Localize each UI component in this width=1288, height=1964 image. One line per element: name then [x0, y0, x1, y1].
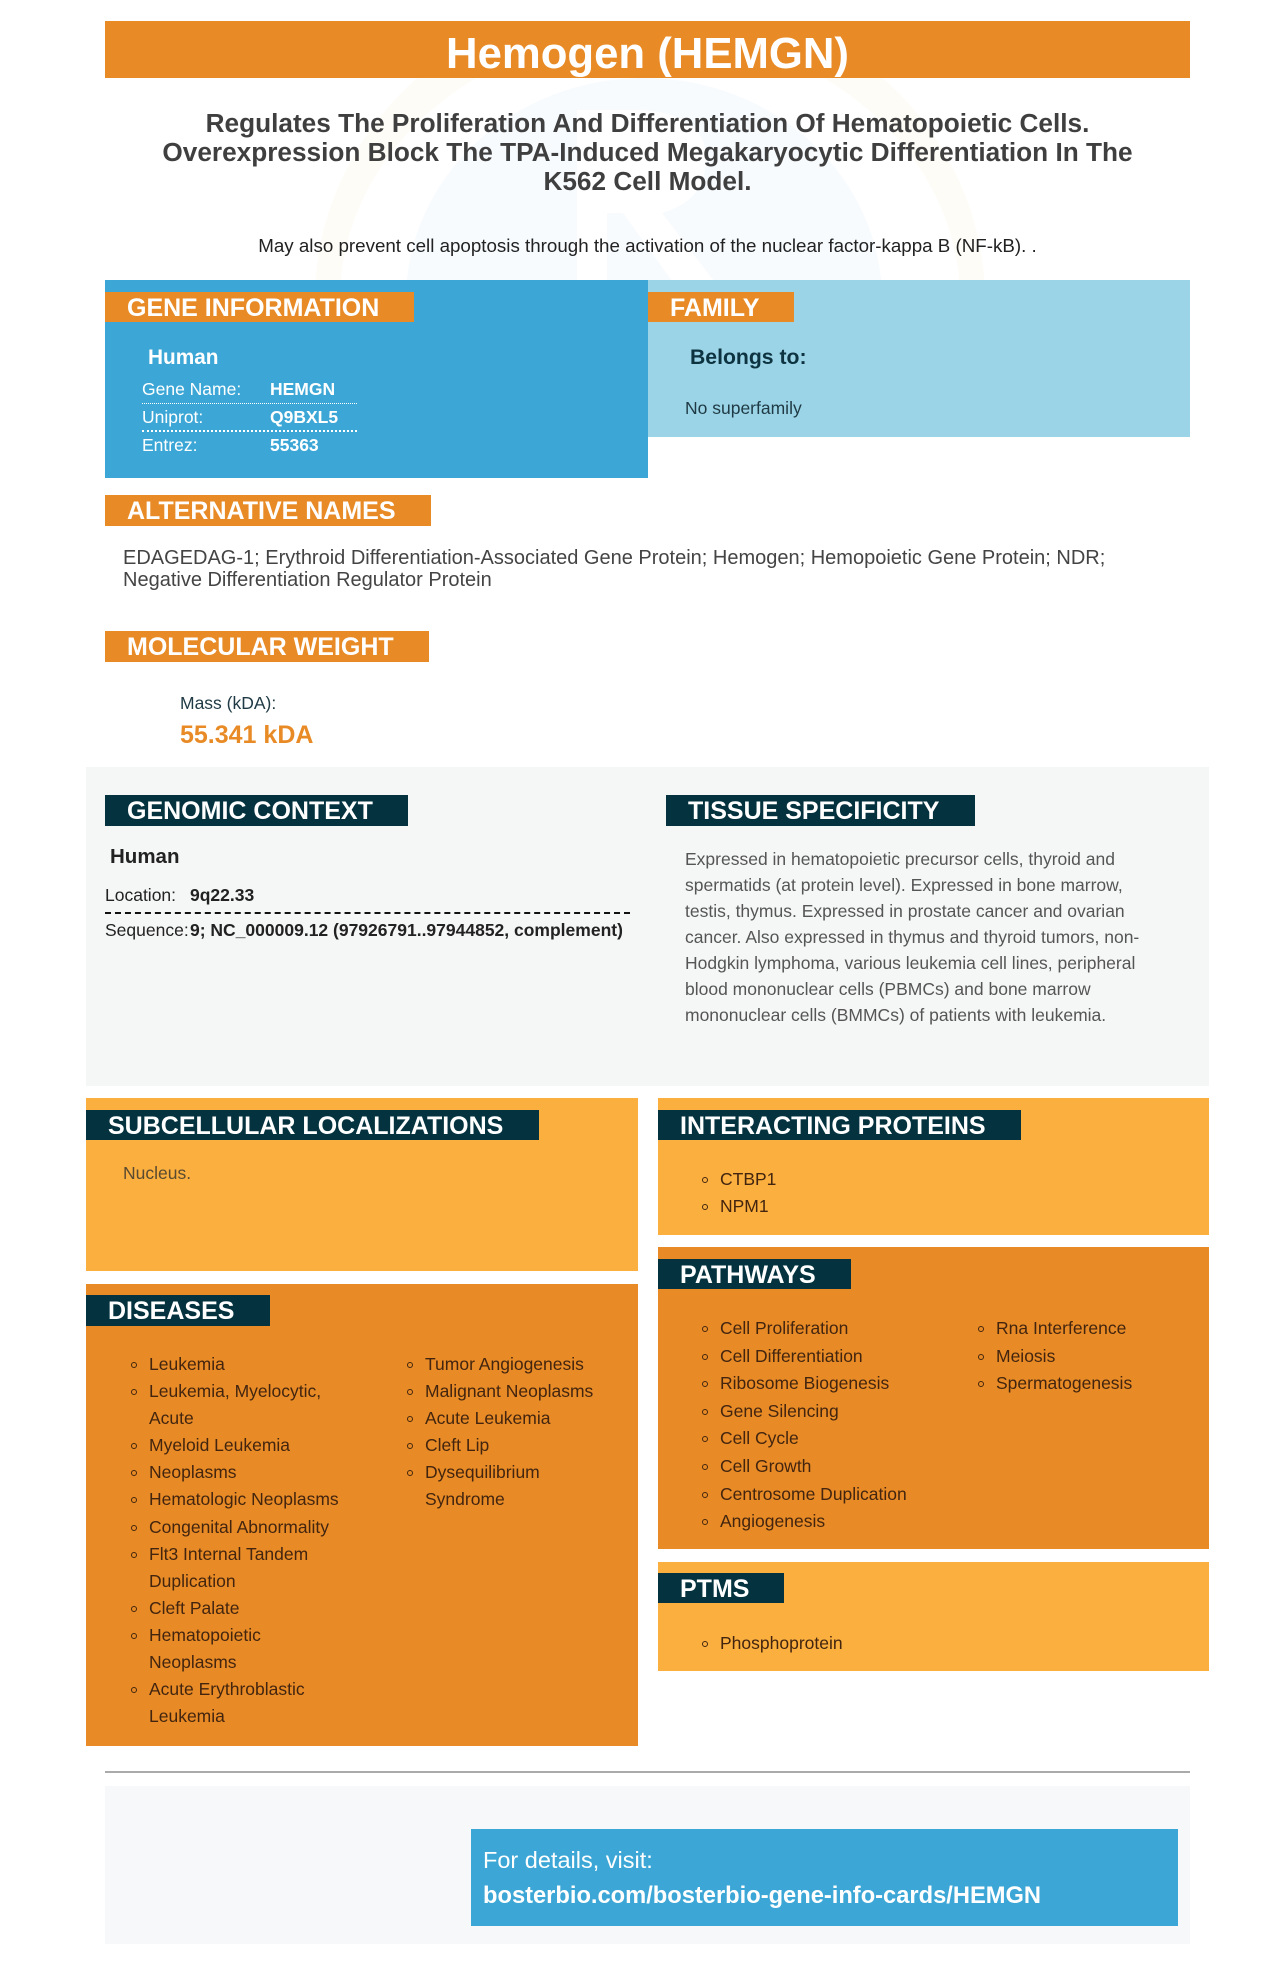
title banner: Hemogen (HEMGN) — [446, 29, 849, 78]
disease list column 2: Malignant Neoplasms — [425, 1381, 593, 1401]
location row: 9q22.33 — [190, 885, 254, 905]
pathway list column 1: Ribosome Biogenesis — [720, 1373, 889, 1393]
url: bosterbio.com/bosterbio-gene-info-cards/HEMGN — [483, 1883, 1041, 1909]
species label: Human — [148, 346, 218, 369]
panel: interacting proteins — [658, 1098, 1209, 1235]
pathway list column 1: Centrosome Duplication — [720, 1484, 907, 1504]
protein list — [702, 1168, 776, 1216]
tissue specificity text: spermatids (at protein level). Expressed in bone marrow, — [685, 875, 1123, 895]
disease list column 2: Dysequilibrium — [425, 1462, 540, 1482]
heading: interacting proteins: INTERACTING PROTEINS — [680, 1112, 986, 1140]
subtitle — [162, 108, 1133, 196]
protein list: NPM1 — [720, 1196, 769, 1216]
tissue specificity text: blood mononuclear cells (PBMCs) and bone marrow — [685, 979, 1091, 999]
heading: pathways — [658, 1259, 851, 1289]
pathway list column 1: Cell Differentiation — [720, 1346, 863, 1366]
tissue specificity text: Hodgkin lymphoma, various leukemia cell lines, peripheral — [685, 953, 1135, 973]
tissue specificity text: Expressed in hematopoietic precursor cells, thyroid and — [685, 849, 1115, 869]
alternative names text: EDAGEDAG-1; Erythroid Differentiation-Associated Gene Protein; Hemogen; Hemopoietic Gene Protein; NDR; — [123, 547, 1105, 569]
localization text: Nucleus. — [123, 1163, 191, 1183]
heading: genomic context: GENOMIC CONTEXT — [127, 797, 373, 825]
pathway list column 2 — [978, 1318, 1132, 1393]
heading: alternative names: ALTERNATIVE NAMES — [127, 497, 396, 525]
entrez row — [142, 435, 319, 455]
heading: ptms: PTMS — [680, 1575, 749, 1603]
pathway list column 1: Cell Growth — [720, 1456, 811, 1476]
disease list column 1 — [131, 1354, 339, 1726]
visit label: For details, visit: — [483, 1847, 653, 1873]
panel: ptms — [658, 1562, 1209, 1671]
sequence row: 9; NC_000009.12 (97926791..97944852, complement) — [190, 920, 623, 940]
heading: molecular weight: MOLECULAR WEIGHT — [127, 633, 394, 661]
disease list column 2: Acute Leukemia — [425, 1408, 550, 1428]
panel: family — [648, 280, 1190, 437]
panel: genomic context and tissue specificity — [86, 767, 1209, 1086]
entrez row: Entrez: — [142, 435, 197, 455]
disease list column 1: Neoplasms — [149, 1462, 237, 1482]
uniprot row: Q9BXL5 — [270, 407, 338, 427]
pathway list column 1: Cell Cycle — [720, 1428, 799, 1448]
location row — [105, 885, 254, 905]
disease list column 1: Hematopoietic — [149, 1625, 261, 1645]
protein list: CTBP1 — [720, 1168, 776, 1188]
uniprot row — [142, 407, 338, 427]
disease list column 1: Leukemia, Myelocytic, — [149, 1381, 321, 1401]
location row: Location: — [105, 885, 176, 905]
panel: pathways — [658, 1247, 1209, 1549]
pathway list column 2: Spermatogenesis — [996, 1373, 1132, 1393]
gene name row — [142, 379, 335, 399]
family value: No superfamily — [685, 398, 802, 418]
disease list column 2: Tumor Angiogenesis — [425, 1354, 584, 1374]
ptm list: Phosphoprotein — [720, 1633, 843, 1653]
description: May also prevent cell apoptosis through the activation of the nuclear factor-kappa B (NF-kB). . — [258, 235, 1037, 256]
heading: family: FAMILY — [670, 294, 759, 322]
disease list column 1: Duplication — [149, 1571, 236, 1591]
pathway list column 2: Meiosis — [996, 1346, 1055, 1366]
title banner — [105, 21, 1190, 78]
pathway list column 2: Rna Interference — [996, 1318, 1126, 1338]
entrez row: 55363 — [270, 435, 319, 455]
background watermark logo — [300, 70, 1000, 285]
heading: gene information: GENE INFORMATION — [127, 294, 379, 322]
panel: gene information — [105, 280, 648, 478]
disease list column 1: Flt3 Internal Tandem — [149, 1544, 308, 1564]
belongs to label: Belongs to: — [690, 346, 807, 369]
panel: subcellular localizations — [86, 1098, 638, 1271]
disease list column 2 — [407, 1354, 593, 1509]
panel: diseases — [86, 1284, 638, 1746]
pathway list column 1: Angiogenesis — [720, 1511, 825, 1531]
disease list column 1: Congenital Abnormality — [149, 1517, 329, 1537]
disease list column 1: Leukemia — [149, 1354, 225, 1374]
tissue specificity text — [685, 849, 1139, 1025]
tissue specificity text: testis, thymus. Expressed in prostate cancer and ovarian — [685, 901, 1125, 921]
disease list column 2: Syndrome — [425, 1489, 505, 1509]
pathway list column 1: Gene Silencing — [720, 1401, 839, 1421]
heading: diseases: DISEASES — [108, 1297, 234, 1325]
disease list column 1: Hematologic Neoplasms — [149, 1489, 339, 1509]
subtitle: Overexpression Block The TPA-Induced Megakaryocytic Differentiation In The — [162, 137, 1133, 167]
heading: ptms — [658, 1573, 784, 1603]
heading: pathways: PATHWAYS — [680, 1261, 816, 1289]
pathway list column 1 — [702, 1318, 907, 1531]
pathway list column 1: Cell Proliferation — [720, 1318, 848, 1338]
subtitle: Regulates The Proliferation And Differentiation Of Hematopoietic Cells. — [206, 108, 1089, 138]
tissue specificity text: mononuclear cells (BMMCs) of patients with leukemia. — [685, 1005, 1106, 1025]
sequence row: Sequence: — [105, 920, 189, 940]
gene name row: HEMGN — [270, 379, 335, 399]
disease list column 1: Acute — [149, 1408, 194, 1428]
uniprot row: Uniprot: — [142, 407, 203, 427]
heading: tissue specificity: TISSUE SPECIFICITY — [688, 797, 939, 825]
mass label: Mass (kDA): — [180, 693, 276, 713]
species label: Human — [110, 845, 179, 868]
disease list column 1: Myeloid Leukemia — [149, 1435, 290, 1455]
disease list column 2: Cleft Lip — [425, 1435, 489, 1455]
heading: diseases — [86, 1295, 270, 1326]
disease list column 1: Cleft Palate — [149, 1598, 239, 1618]
tissue specificity text: cancer. Also expressed in thymus and thyroid tumors, non- — [685, 927, 1139, 947]
disease list column 1: Neoplasms — [149, 1652, 237, 1672]
gene name row: Gene Name: — [142, 379, 241, 399]
heading: family — [648, 292, 794, 322]
disease list column 1: Leukemia — [149, 1706, 225, 1726]
disease list column 1: Acute Erythroblastic — [149, 1679, 305, 1699]
alternative names text: Negative Differentiation Regulator Protein — [123, 569, 492, 591]
footer panel — [105, 1786, 1190, 1944]
heading: subcellular localizations: SUBCELLULAR LOCALIZATIONS — [108, 1112, 503, 1140]
call to action box — [471, 1829, 1178, 1926]
subtitle: K562 Cell Model. — [543, 166, 752, 196]
alternative names text — [123, 547, 1105, 591]
mass value: 55.341 kDA — [180, 721, 313, 749]
